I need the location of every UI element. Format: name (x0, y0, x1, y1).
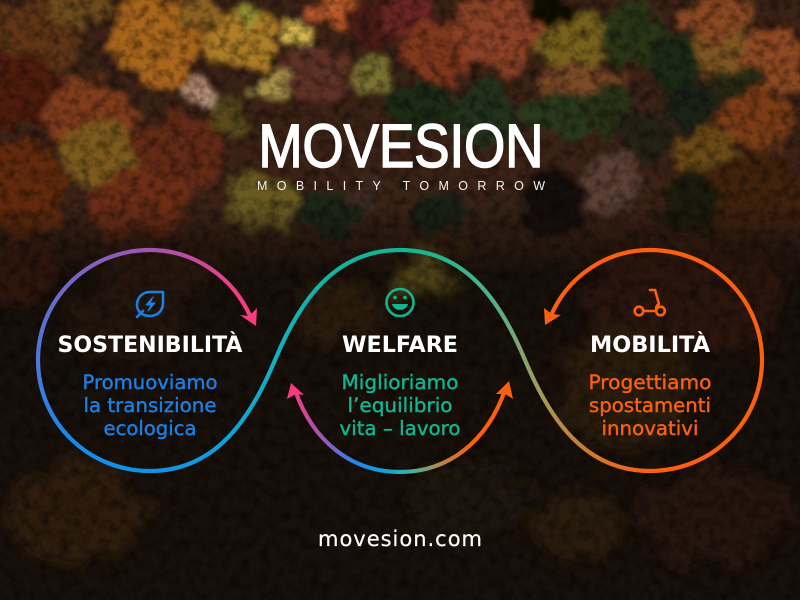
centre lower arc (295, 390, 505, 472)
logo: MOVESION wordmark: MOVESION (258, 112, 544, 180)
description: spostamenti (589, 394, 711, 417)
flow line: infinity loop with arrows (38, 250, 762, 472)
panel: mobilità (588, 290, 712, 440)
description: vita – lavoro (340, 417, 460, 440)
arrowhead: centre left (287, 383, 304, 399)
arrowhead: right circle (544, 308, 561, 325)
wave rising to centre (150, 250, 400, 471)
icon: leaf with bolt (137, 292, 163, 317)
description: la transizione (84, 394, 216, 417)
right circle loop (550, 250, 762, 471)
tagline: MOBILITY TOMORROW (257, 179, 545, 193)
description: Promuoviamo (82, 371, 218, 394)
icon: smiley (386, 289, 414, 316)
panel: sostenibilità (58, 292, 243, 440)
arrowhead: centre right (496, 381, 513, 399)
description: l’equilibrio (348, 394, 452, 417)
arrowhead: left circle (240, 308, 257, 326)
website url: movesion.com (318, 527, 482, 551)
icon: scooter (635, 290, 665, 315)
wave falling to right (400, 250, 650, 471)
heading: WELFARE (342, 332, 458, 358)
left circle lower-left arc (38, 360, 150, 471)
description: Progettiamo (588, 371, 712, 394)
description (82, 371, 218, 440)
description (588, 371, 712, 440)
heading: SOSTENIBILITÀ (58, 330, 243, 358)
description: Miglioriamo (342, 371, 458, 394)
description: innovativi (602, 417, 698, 440)
panel: welfare (340, 289, 460, 440)
left circle upper arc (150, 250, 251, 318)
description: ecologica (104, 417, 196, 440)
left circle upper-left arc (38, 250, 150, 360)
heading: MOBILITÀ (590, 330, 711, 358)
description (340, 371, 460, 440)
